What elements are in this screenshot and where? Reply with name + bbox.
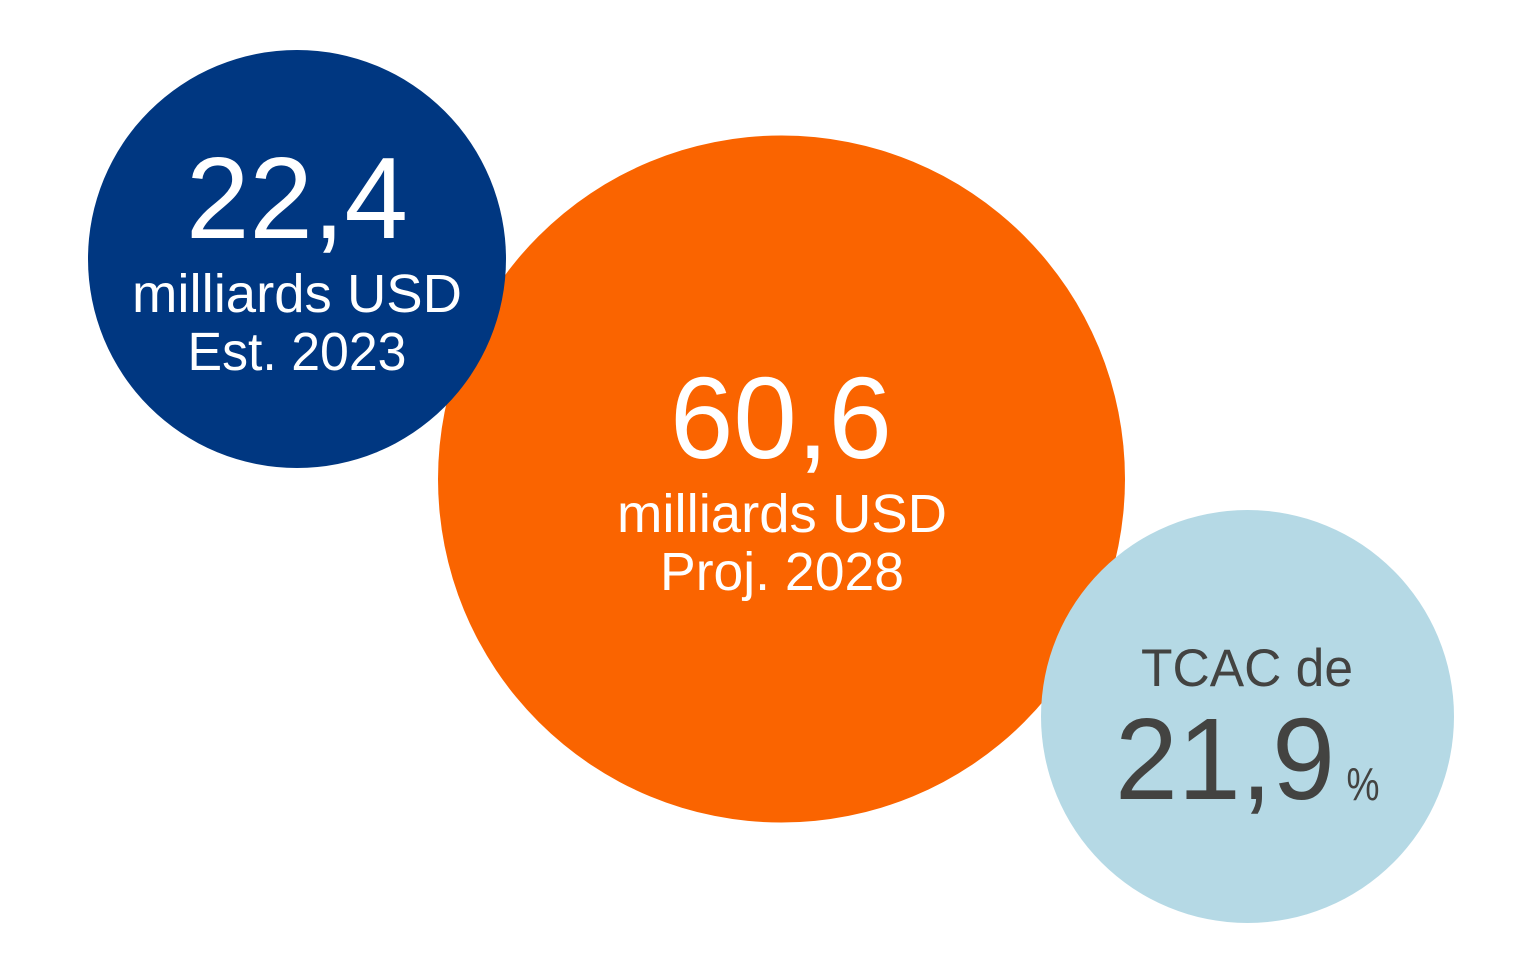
value: 60,6: 60,6 xyxy=(670,353,892,483)
label: milliards USD: milliards USD xyxy=(132,264,462,324)
value: 21,9: 21,9 xyxy=(1115,694,1335,824)
label: Est. 2023: Est. 2023 xyxy=(188,322,406,382)
label: Proj. 2028: Proj. 2028 xyxy=(660,542,904,602)
value: 22,4: 22,4 xyxy=(186,133,408,263)
bubble: CAGR xyxy=(1041,510,1454,923)
bubble: 2028 projection xyxy=(438,136,1125,822)
label: milliards USD: milliards USD xyxy=(617,484,947,544)
bubble: 2023 estimate xyxy=(88,50,506,468)
label: TCAC de: TCAC de xyxy=(1141,639,1353,698)
unit: percent: % xyxy=(1346,758,1380,810)
